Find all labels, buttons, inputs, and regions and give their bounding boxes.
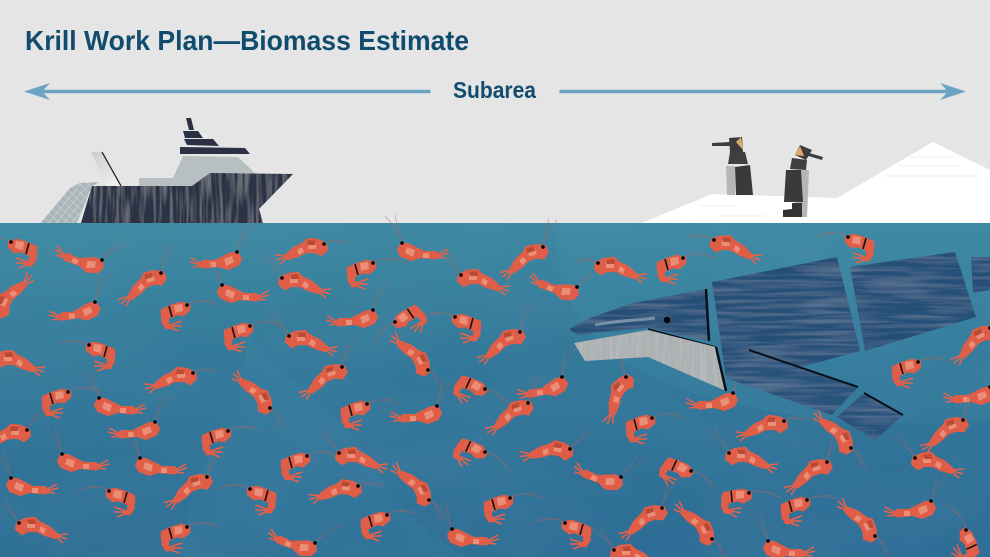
title: Krill Work Plan—Biomass Estimate	[25, 25, 469, 56]
research ship	[40, 118, 293, 223]
sky background	[0, 0, 990, 223]
ship: crane	[91, 152, 121, 186]
whale: tail section	[971, 257, 990, 293]
whale: upper head	[569, 289, 716, 347]
penguin right: neck	[790, 158, 807, 170]
penguin left	[712, 137, 753, 195]
penguin right: body	[784, 170, 803, 202]
whale: lower jaw	[574, 330, 726, 391]
whale: eye	[664, 317, 670, 323]
penguin left: belly	[726, 166, 735, 195]
ship: bridge stripes	[180, 118, 250, 154]
penguin left: neck	[728, 152, 748, 164]
krill swarm	[0, 215, 990, 557]
subarea label: Subarea	[453, 77, 536, 103]
arrow: subarea right	[561, 83, 966, 100]
ice floe	[642, 142, 990, 223]
ocean: lighter swirl	[180, 325, 470, 557]
whale: rear body	[850, 252, 976, 351]
penguin right: belly	[793, 170, 809, 217]
ship: cabin	[139, 156, 255, 187]
ship: stern mesh	[40, 182, 100, 223]
ocean background	[0, 223, 990, 557]
whale	[569, 252, 990, 440]
whale: front body	[712, 257, 860, 378]
whale: flipper tip	[837, 393, 903, 440]
ocean: right glow	[558, 223, 990, 423]
penguin left: head	[729, 137, 743, 152]
penguin left: face	[736, 137, 743, 150]
penguin right: face	[795, 146, 804, 156]
penguin left: back	[735, 165, 753, 195]
arrow: subarea left	[24, 83, 429, 100]
whale: flipper	[726, 350, 858, 415]
penguin right: beak	[805, 152, 823, 160]
penguin right	[783, 145, 823, 217]
penguin left: beak	[712, 142, 730, 146]
penguin right: foot	[783, 203, 802, 217]
ship: hull	[81, 173, 293, 223]
penguin right: head	[795, 145, 812, 160]
